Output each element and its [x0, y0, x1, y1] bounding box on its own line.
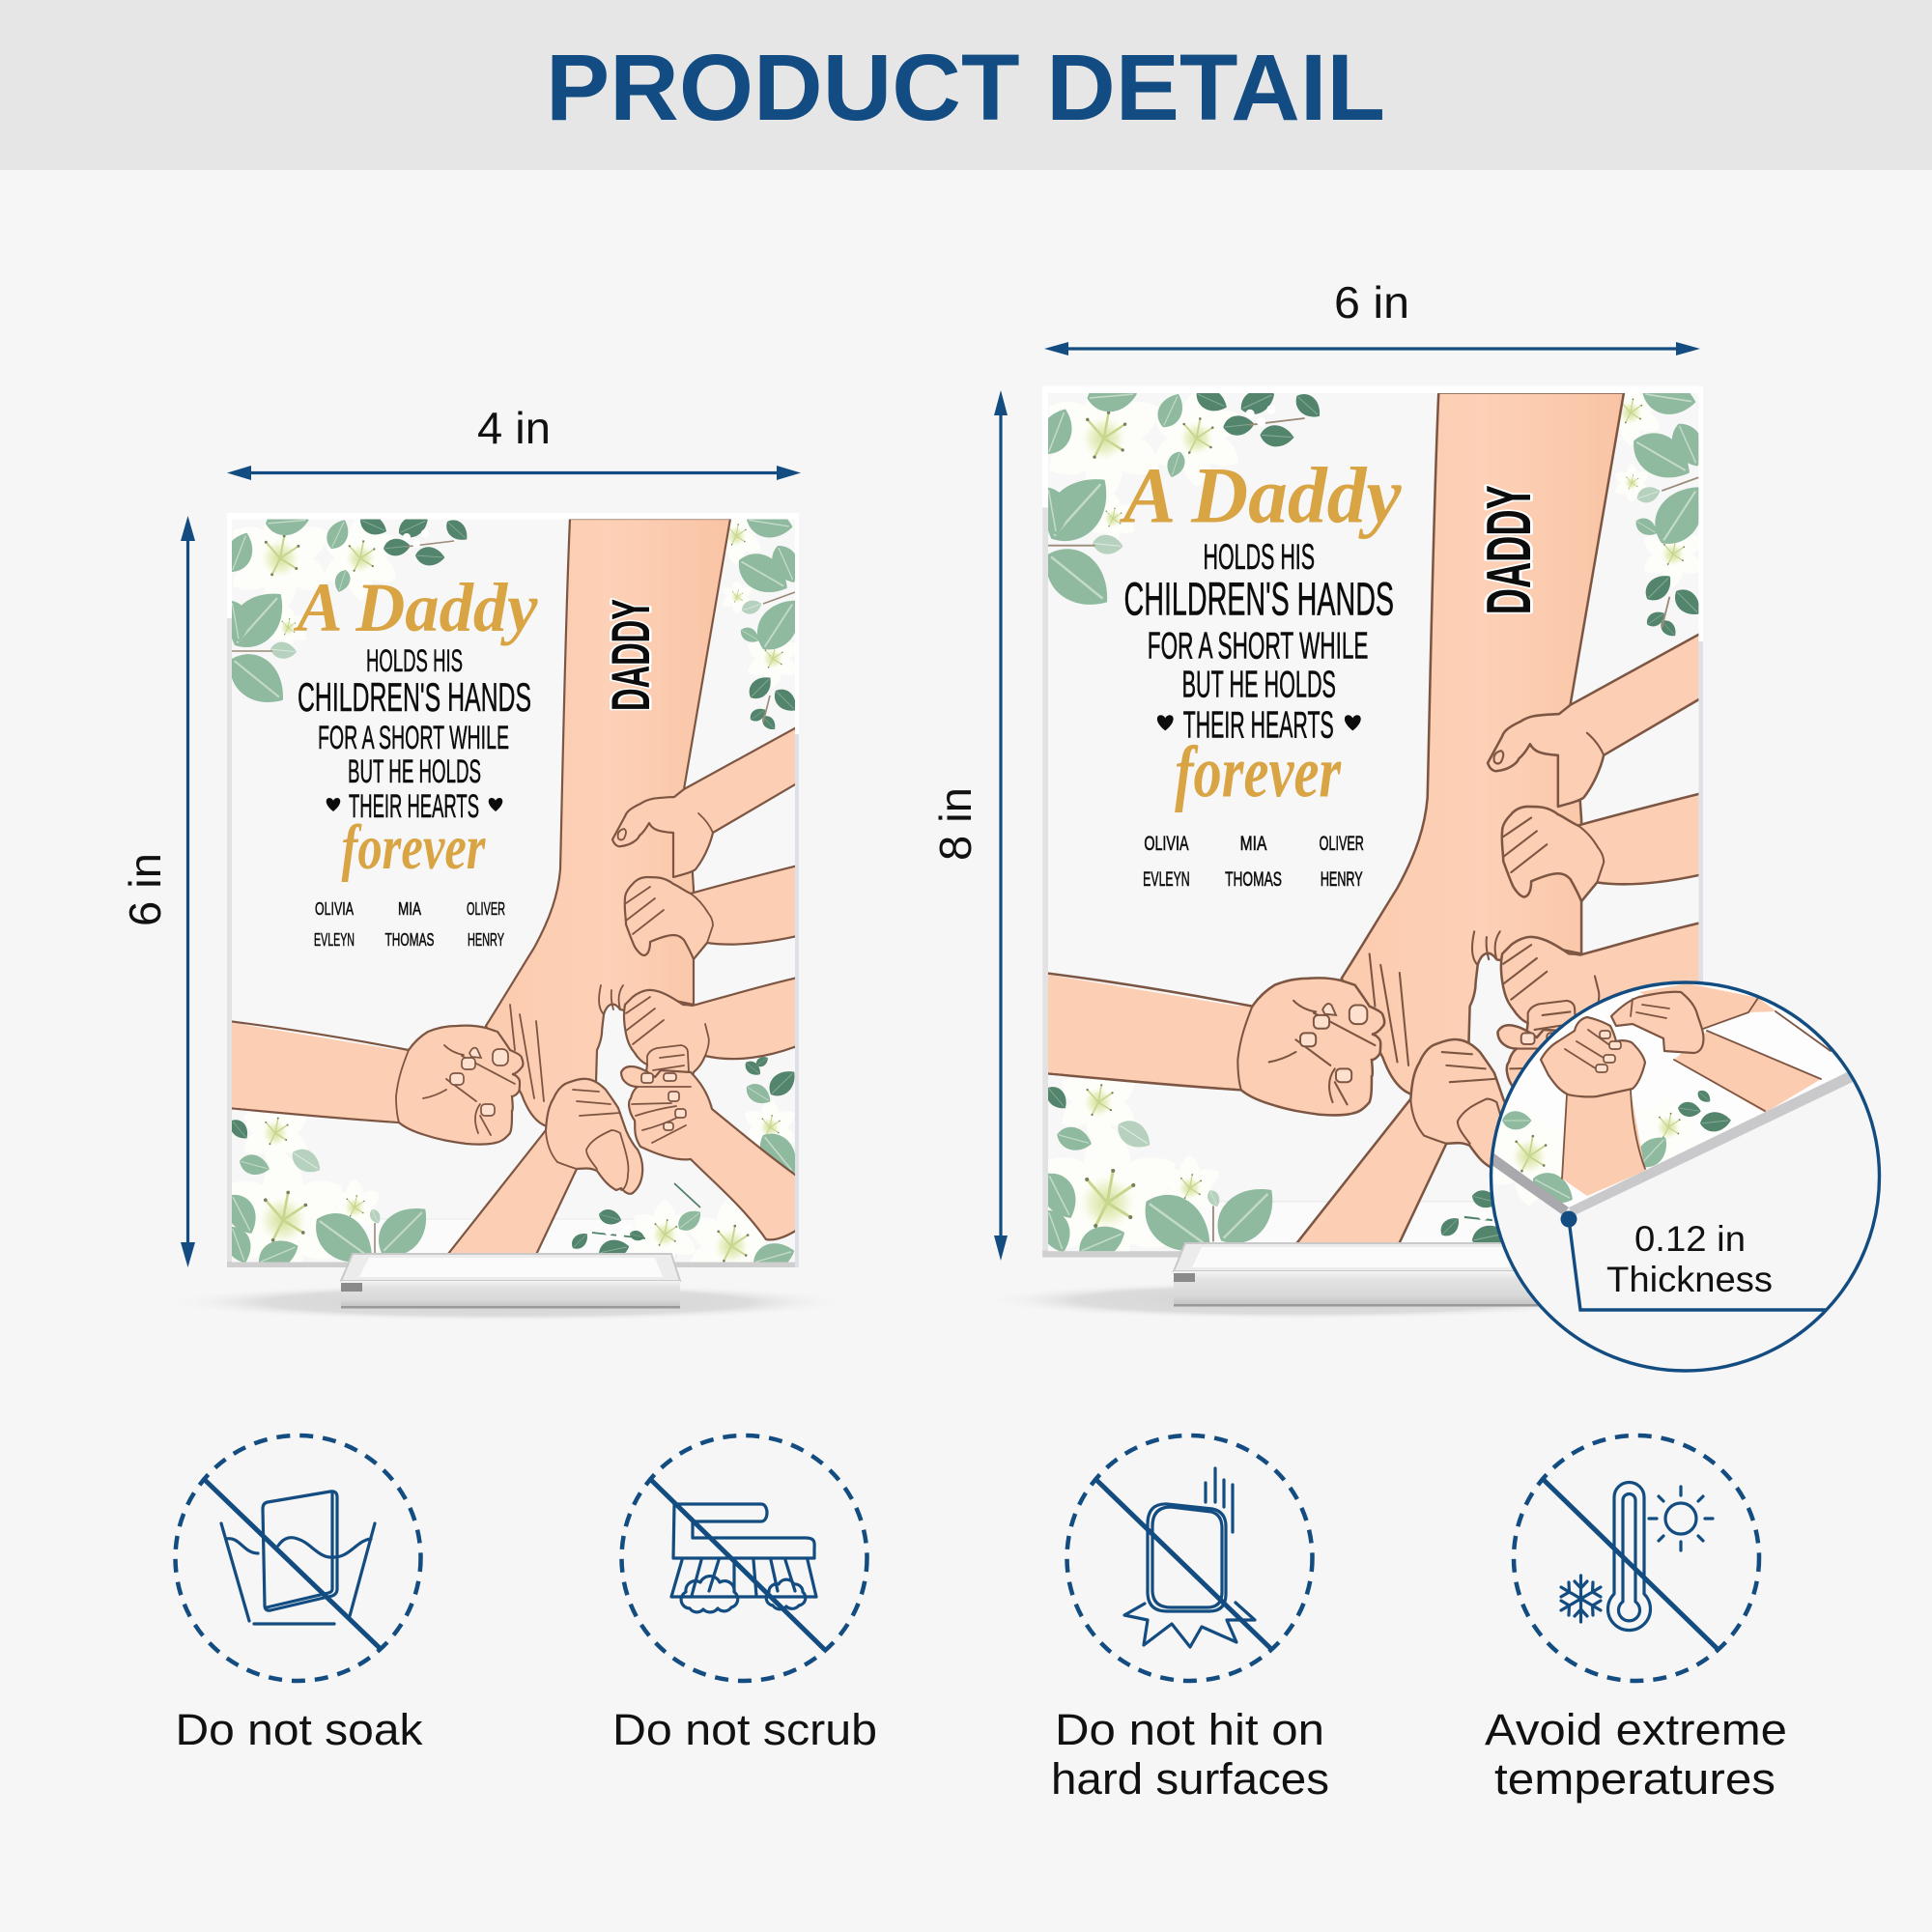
quote text: FOR A SHORT WHILE	[1148, 624, 1368, 667]
acrylic base	[341, 1254, 680, 1308]
panel: small plaque 4 x 6 in	[220, 513, 799, 1318]
quote text: BUT HE HOLDS	[348, 753, 481, 790]
quote text	[298, 643, 531, 825]
floral corners	[1028, 375, 1716, 1290]
heading: A Daddy: A Daddy	[294, 569, 539, 646]
dimension: 4 in width	[227, 403, 801, 480]
quote text: HOLDS HIS	[1204, 537, 1315, 577]
callout text	[1606, 1219, 1773, 1299]
children names: OLIVIA	[1144, 833, 1189, 855]
children names: HENRY	[468, 930, 504, 950]
dimension: 6 in width	[1044, 277, 1700, 355]
heading: A Daddy: A Daddy	[1119, 450, 1403, 539]
children names: THOMAS	[384, 930, 435, 950]
children names: OLIVIA	[315, 899, 354, 919]
dimension: 8 in height	[930, 390, 1008, 1261]
label: Do not scrub	[612, 1705, 877, 1754]
children names: MIA	[1240, 833, 1266, 855]
children names: MIA	[398, 899, 421, 919]
heading: forever: forever	[342, 812, 487, 883]
label	[1051, 1705, 1329, 1804]
quote text: FOR A SHORT WHILE	[318, 720, 509, 756]
hands illustration	[1043, 392, 1706, 1247]
label: hard surfaces	[1051, 1754, 1329, 1804]
base shadow	[162, 1283, 854, 1321]
children names: EVLEYN	[1143, 868, 1190, 891]
quote text: CHILDREN'S HANDS	[1124, 573, 1394, 625]
icon: falling plaque with impact burst	[1066, 1435, 1312, 1681]
children names: EVLEYN	[314, 930, 355, 950]
children names: HENRY	[1321, 868, 1363, 891]
plaque body	[1028, 375, 1716, 1290]
label: temperatures	[1494, 1754, 1776, 1804]
arm label: DADDY: DADDY	[600, 599, 661, 711]
floral corners	[214, 503, 810, 1295]
dimension: 6 in height: 6 in	[120, 853, 170, 926]
label	[1485, 1705, 1787, 1804]
icon: basin with plaque	[176, 1435, 421, 1681]
quote text	[1124, 537, 1394, 746]
base shadow	[980, 1281, 1618, 1320]
quote text: HOLDS HIS	[366, 643, 463, 678]
thickness edge strips	[1569, 1072, 1853, 1216]
hands illustration	[228, 519, 802, 1259]
dimension: 6 in height	[120, 516, 195, 1267]
icon: thermometer, sun and snowflake	[1514, 1435, 1759, 1681]
callout text: 0.12 in	[1634, 1219, 1746, 1259]
plaque frame	[227, 513, 799, 1267]
callout: thickness magnifier	[1478, 966, 1893, 1371]
magnified plaque corner	[1493, 983, 1853, 1215]
children names: OLIVER	[1320, 833, 1364, 855]
care item: avoid extreme temperatures	[1485, 1435, 1787, 1804]
children names	[1144, 836, 1364, 887]
label: Avoid extreme	[1485, 1705, 1787, 1754]
heading: forever: forever	[1175, 732, 1342, 813]
panel: large plaque 6 x 8 in	[980, 375, 1716, 1320]
quote text: THEIR HEARTS	[1183, 703, 1334, 746]
children names: THOMAS	[1225, 868, 1282, 891]
children names	[315, 902, 505, 947]
dimension: 4 in width: 4 in	[477, 403, 551, 453]
quote text: THEIR HEARTS	[349, 788, 479, 825]
leader line	[1561, 1211, 1826, 1310]
plaque artwork	[214, 503, 810, 1295]
care item: do not scrub	[612, 1435, 877, 1754]
callout text: Thickness	[1606, 1260, 1773, 1299]
care item: do not soak	[176, 1435, 423, 1754]
title: PRODUCT DETAIL	[546, 35, 1385, 140]
dimension: 8 in height: 8 in	[930, 787, 980, 861]
header band	[0, 0, 1932, 170]
acrylic base	[1174, 1243, 1555, 1306]
dimension: 6 in width: 6 in	[1334, 277, 1409, 327]
arm label: DADDY: DADDY	[1473, 485, 1544, 614]
plaque artwork	[1028, 375, 1716, 1290]
label: Do not soak	[176, 1705, 423, 1754]
care item: do not hit on hard surfaces	[1051, 1435, 1329, 1804]
label: Do not hit on	[1055, 1705, 1324, 1754]
quote text: CHILDREN'S HANDS	[298, 674, 531, 720]
icon: scrub brush	[622, 1435, 867, 1681]
children names: OLIVER	[467, 899, 505, 919]
quote text: BUT HE HOLDS	[1182, 664, 1336, 706]
